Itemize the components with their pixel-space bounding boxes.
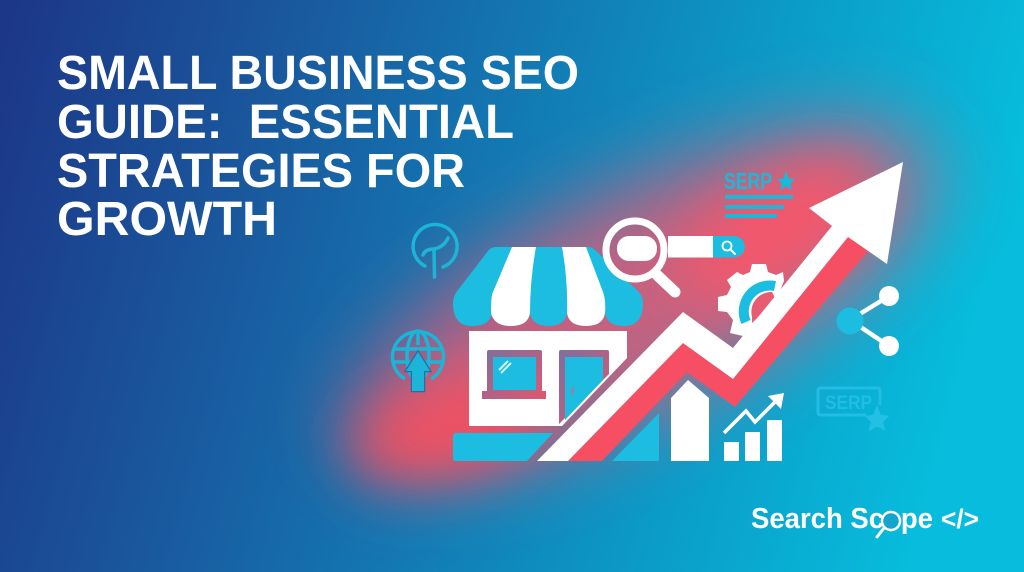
brand logo: Search Scope xyxy=(751,503,933,535)
search bar xyxy=(668,236,745,258)
white bar house xyxy=(671,380,709,461)
title: STRATEGIES FOR xyxy=(57,145,465,198)
magnifying glass xyxy=(606,221,675,292)
store building xyxy=(453,247,659,461)
SERP list card xyxy=(724,168,795,218)
SERP badge with star: SERP xyxy=(825,393,872,414)
logo magnifier xyxy=(877,512,900,537)
title: SMALL BUSINESS SEO xyxy=(57,47,579,100)
icon: share nodes xyxy=(836,286,899,356)
teal ramp xyxy=(612,413,659,461)
growth arrow white xyxy=(537,162,903,461)
icon: clock badge xyxy=(413,224,457,277)
icon: gear xyxy=(718,264,784,336)
logo code brackets: </> xyxy=(941,504,979,534)
store step xyxy=(453,433,553,461)
title xyxy=(57,47,579,246)
mini bar chart with trend arrow xyxy=(724,393,784,461)
awning xyxy=(453,247,643,326)
icon: globe with up arrow xyxy=(393,331,444,391)
title: GROWTH xyxy=(57,193,277,246)
door xyxy=(559,350,609,424)
window xyxy=(482,350,546,399)
SERP list card: SERP xyxy=(724,168,772,194)
red glow behind the illustration xyxy=(307,61,973,539)
storefront wall xyxy=(469,331,627,426)
SERP badge with star xyxy=(818,388,890,431)
growth arrow red shadow xyxy=(568,237,868,461)
title: GUIDE: ESSENTIAL xyxy=(57,96,514,149)
